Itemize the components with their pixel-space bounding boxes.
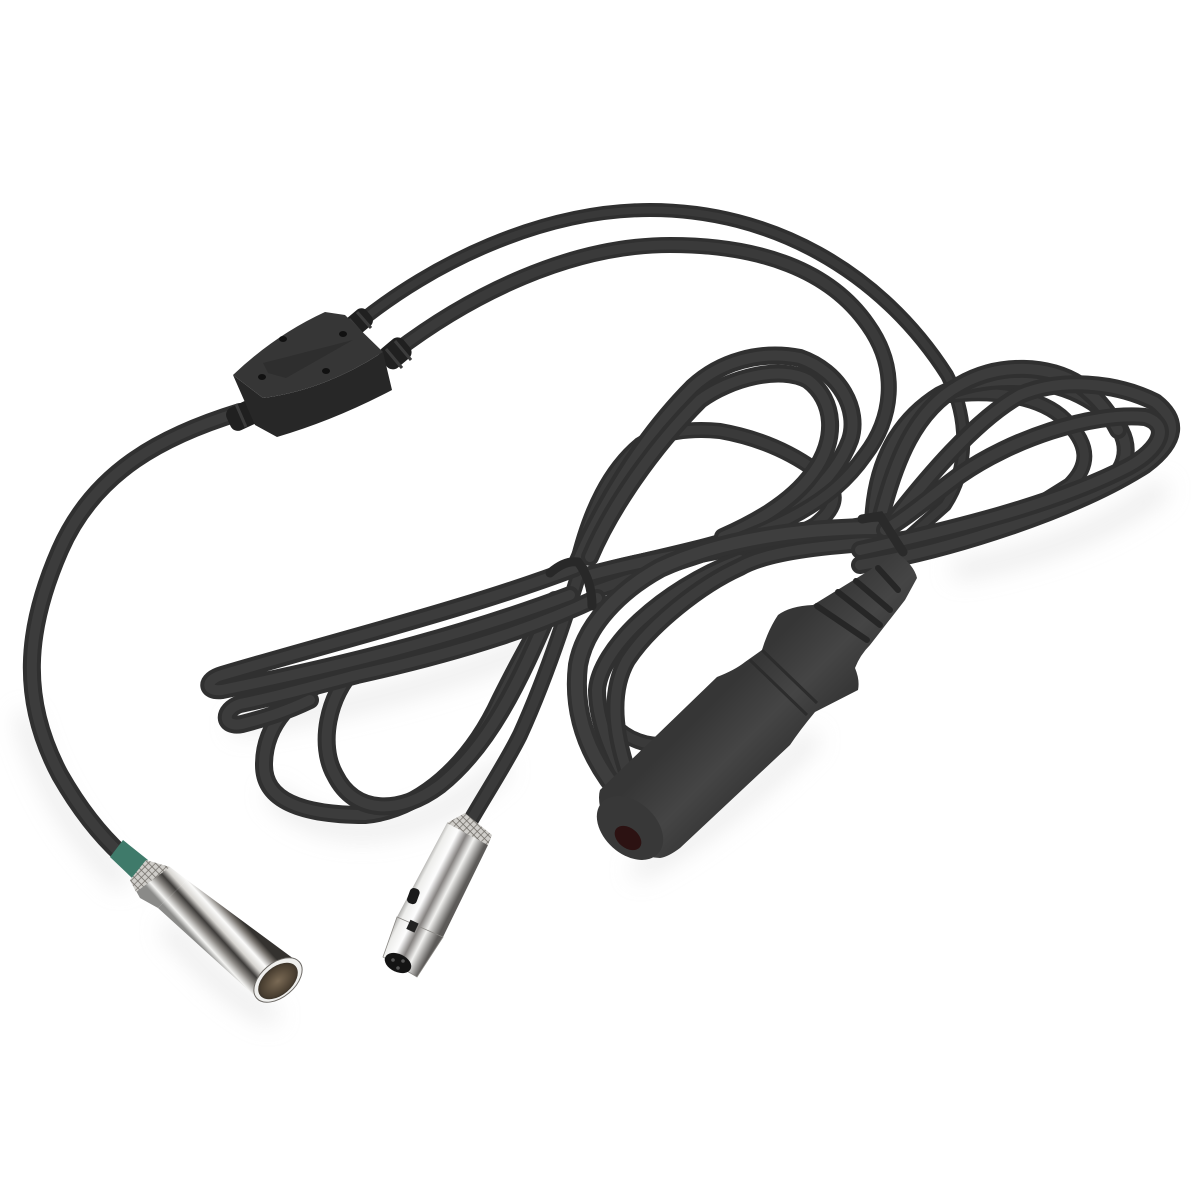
cable: loop around socket [577, 528, 905, 800]
plug barrel [158, 880, 298, 998]
cable: right back loops [873, 369, 1126, 530]
locking button [406, 887, 421, 905]
female contact face [382, 949, 414, 977]
latch cutout [406, 920, 419, 933]
female lower body [383, 917, 443, 977]
cable: lower left loops [264, 600, 555, 815]
socket end rim [584, 783, 676, 873]
female upper body [397, 823, 488, 937]
plug knurled collar [130, 860, 170, 892]
moulded socket [584, 553, 917, 873]
cable: top center loops [577, 356, 853, 573]
grommet: left [223, 397, 263, 434]
strain relief ribs [817, 568, 898, 640]
socket collar grooves [750, 650, 817, 715]
mini XLR female plug [382, 813, 492, 977]
splitter junction block [223, 305, 415, 437]
strap: left cable tie [550, 562, 592, 606]
plug bore [251, 955, 305, 1007]
plug neck [130, 867, 187, 908]
cable: first left tip [209, 568, 575, 690]
mini XLR male plug [130, 860, 310, 1011]
splitter side face [233, 352, 392, 437]
cable: lower splitter lead [395, 245, 889, 590]
splitter screw holes [258, 331, 347, 380]
cable: second left tip [227, 598, 597, 725]
cable: run to mini XLR plug [468, 570, 580, 825]
grommet: lower [376, 334, 415, 373]
cable: bundle strand [590, 520, 900, 575]
soft shadows [25, 490, 1160, 1015]
cable: upper splitter lead [360, 210, 963, 545]
plug open end [246, 949, 310, 1011]
female knurled collar [447, 813, 492, 845]
splitter label plate [263, 340, 353, 378]
cable: long left lead [32, 412, 240, 855]
green heat-shrink band [110, 840, 148, 878]
strap: right cable tie [862, 516, 903, 552]
socket body [599, 553, 917, 858]
cable: front right loops [860, 384, 1171, 565]
splitter top face [233, 312, 383, 398]
grommet: top [341, 305, 376, 339]
socket hole [610, 821, 646, 855]
